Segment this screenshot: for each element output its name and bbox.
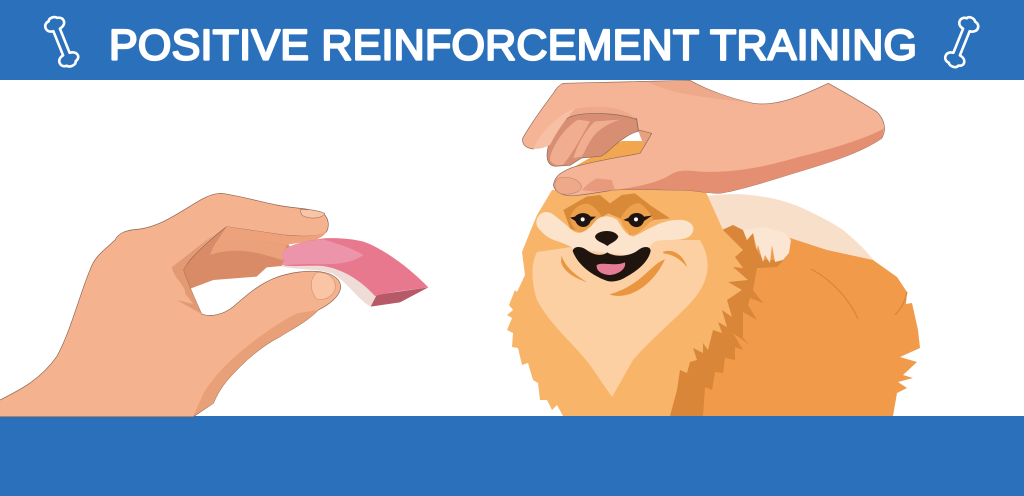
dog: mane shadow [670,225,790,416]
hand: thumb nail [555,177,582,194]
hand: arm underside shadow [615,128,884,193]
treat: highlight [282,239,363,265]
dog: cream face stripe [536,212,693,257]
title: POSITIVE REINFORCEMENT TRAINING [109,22,917,70]
hand: inner palm shading [172,235,213,314]
pale background circle [695,194,875,262]
header band [0,0,1024,80]
icon: left bone [43,14,81,70]
hand: finger one [550,120,590,165]
dog: face [536,193,693,296]
dog: mouth [573,247,651,281]
hand: finger base [547,113,638,166]
hand: arm and thumb [523,80,884,196]
dog: right eye patch [621,203,653,235]
dog: right eye [623,213,652,227]
hand: finger creases [210,241,287,260]
hand: thumb shadow [193,310,318,416]
hand: inner fingers [172,227,290,290]
dog: nose [595,231,618,246]
icon: right bone [943,14,981,70]
hand: thumb joint shadow [582,178,615,192]
hand: finger two [573,120,620,158]
dog: chest bib [532,240,708,397]
hand: index highlight [533,108,575,149]
hand: finger shadow band [568,107,637,120]
hand: finger underside shading [213,227,327,247]
hand: thumb nail [311,273,335,300]
dog: back crease [811,269,858,319]
dog [507,141,920,416]
dog: body [670,230,920,416]
left hand holding treat [0,193,428,417]
treat: underside [371,287,428,307]
dog: right cheek fold [663,251,687,268]
dog: white paw [743,227,791,263]
dog: head and mane [507,190,748,416]
petting hand [523,80,884,196]
dog: left cheek line [561,256,587,282]
hand: fingers [547,107,638,166]
hand: web shadow beside gap [637,128,652,150]
dog: brow markings [563,193,670,235]
hand: finger nail [300,210,325,218]
dog: left eye [570,213,596,227]
treat [280,238,428,307]
dog: tongue [597,262,625,275]
dog: hip crease [895,292,907,315]
hand: upper arm tone [647,81,753,103]
treat: white edge [280,263,377,307]
hand: palm and thumb [0,193,341,417]
dog: left eye patch [570,204,602,235]
dog: head tuft [560,141,660,205]
treat: top [282,238,428,296]
dog: right cheek line [609,259,665,296]
footer band [0,416,1024,496]
